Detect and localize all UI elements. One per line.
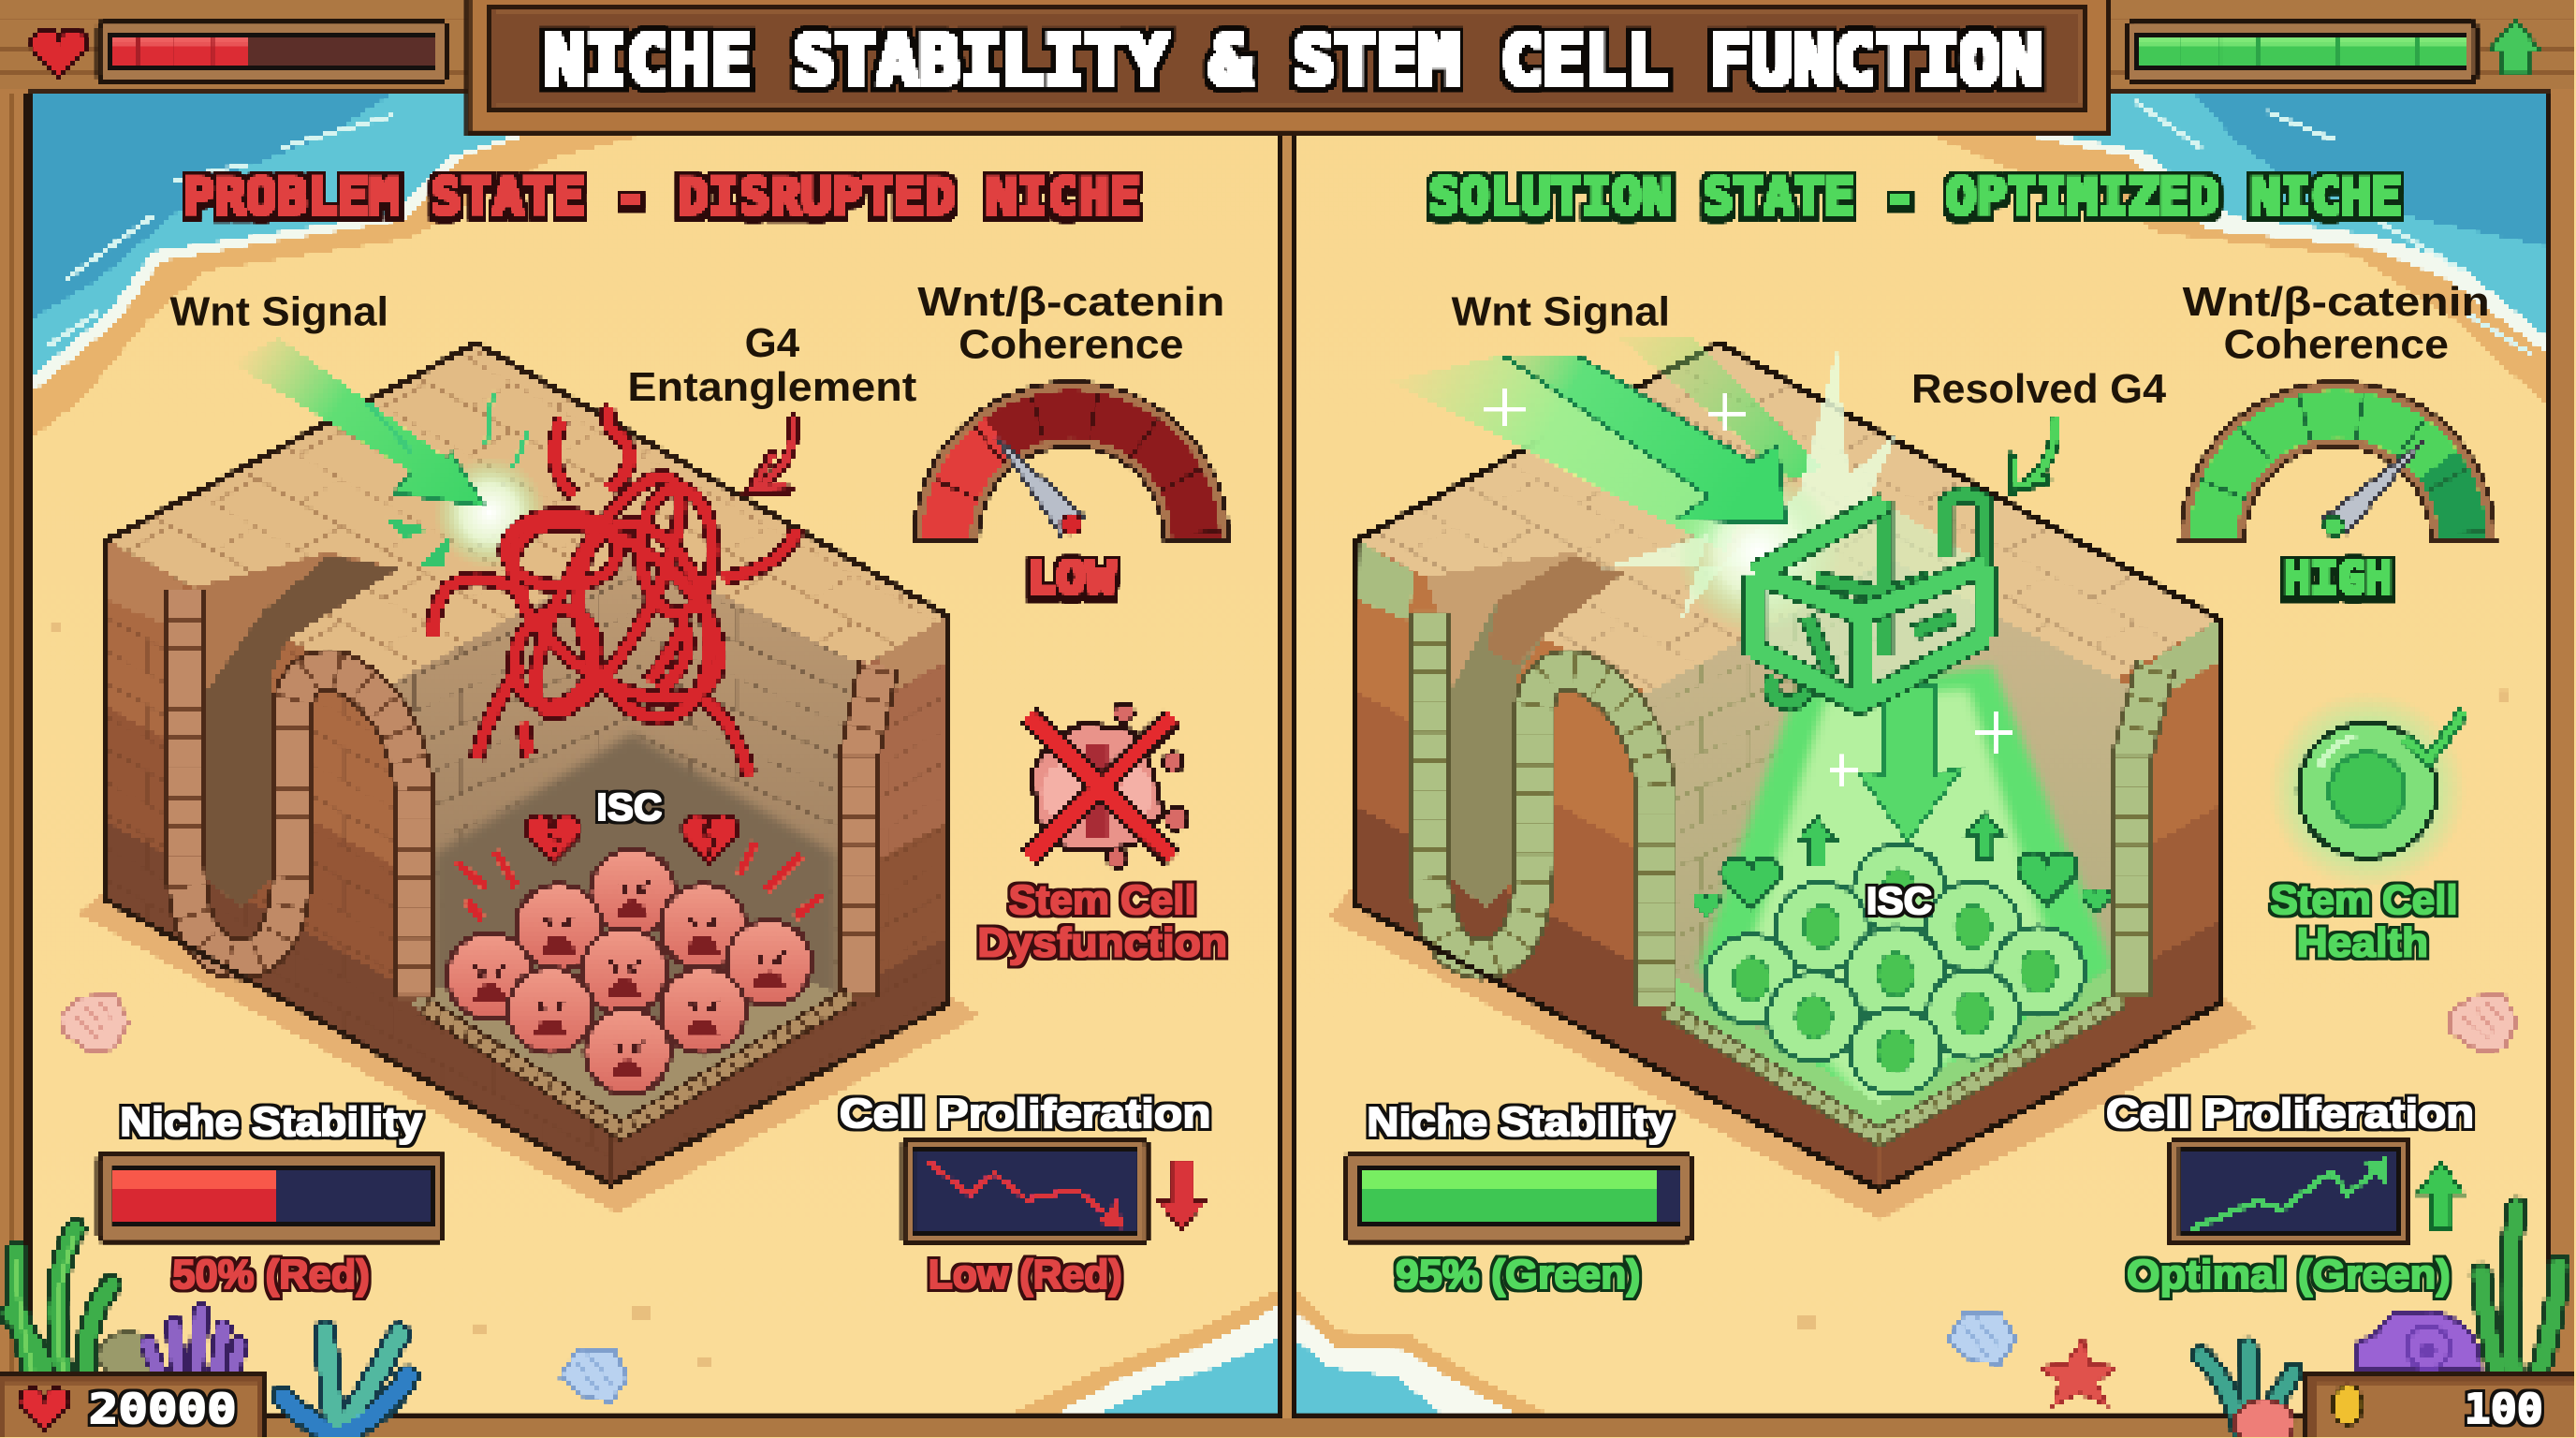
water: top-right shore <box>1928 82 2546 406</box>
crypt lumen <box>1426 552 1623 907</box>
label: G4 entanglement <box>627 320 917 410</box>
niche stability bar: 95% <box>1345 1155 1690 1240</box>
shell: blue <box>1949 1313 2016 1364</box>
shell: pink <box>61 994 128 1051</box>
Wnt signal arrow: bright <box>1392 337 1895 634</box>
arrow up <box>2417 1162 2465 1229</box>
up arrows and hearts <box>1693 812 2110 917</box>
title banner <box>468 0 2108 131</box>
heading: solution state: SOLUTION STATE - OPTIMIZED NICHE <box>1429 169 2402 226</box>
label: Wnt signal: Wnt Signal <box>1452 289 1670 335</box>
gauge value: high: HIGH <box>2284 553 2392 605</box>
white outlined labels <box>120 785 1211 1145</box>
Wnt signal arrow <box>230 339 546 568</box>
label: ISC: ISC <box>1866 879 1932 922</box>
label: coherence <box>2183 279 2490 368</box>
panel: problem state, disrupted niche <box>61 169 1231 1401</box>
panel: solution state, optimized niche <box>1327 169 2517 1405</box>
niche stability bar: 50% <box>98 1155 444 1240</box>
label: ISC: ISC <box>596 785 662 829</box>
top HUD and title banner <box>32 0 2541 131</box>
score panel: hearts <box>0 1373 266 1438</box>
red outlined labels <box>172 877 1227 1298</box>
icon: up arrow <box>2489 22 2541 74</box>
icon: heart <box>32 29 86 77</box>
arrow to resolved G4 <box>2011 420 2056 490</box>
label: stem cell health: Health <box>2297 919 2428 965</box>
water: top-left shore <box>30 82 681 440</box>
arrow down <box>1158 1162 1206 1229</box>
value: 50%: 50% (Red) <box>172 1252 370 1298</box>
score value: 20000: 20000 <box>89 1386 237 1433</box>
G4 tangle <box>433 407 797 775</box>
crypt interior wall <box>394 550 871 1134</box>
label: coherence: Coherence <box>959 322 1184 368</box>
value: optimal: Optimal (Green) <box>2127 1252 2451 1298</box>
heading: problem state: PROBLEM STATE - DISRUPTED NICHE <box>184 169 1140 226</box>
stem cell dysfunction icon <box>1029 703 1188 868</box>
label: Wnt signal: Wnt Signal <box>170 289 388 335</box>
value: low: Low (Red) <box>929 1252 1122 1298</box>
stem cell health icon <box>2269 692 2466 889</box>
seaweed: left <box>10 1229 111 1371</box>
cell proliferation chart: rising <box>2170 1140 2408 1244</box>
health bar: low <box>98 23 446 81</box>
shell: pink <box>2450 994 2517 1051</box>
crypt interior wall <box>1643 559 2145 1134</box>
label: G4 entanglement: Entanglement <box>627 364 917 410</box>
ISC cluster: stressed red cells <box>446 849 812 1094</box>
starfish <box>2039 1339 2117 1405</box>
label: stem cell dysfunction: Dysfunction <box>977 919 1227 965</box>
label: coherence: Wnt/β-catenin <box>917 279 1224 325</box>
label: coherence: Coherence <box>2224 322 2449 368</box>
crypt block: isometric tissue niche, healthy <box>1327 344 2254 1219</box>
teal coral: left <box>283 1331 407 1438</box>
label: coherence <box>917 279 1224 368</box>
coin value: 100: 100 <box>2465 1386 2543 1433</box>
label: stem cell dysfunction <box>977 877 1227 965</box>
sand specks <box>50 624 2510 1365</box>
label: niche stability: Niche Stability <box>1367 1099 1673 1145</box>
cell proliferation chart: falling <box>903 1140 1147 1244</box>
coherence gauge: low <box>912 414 1231 539</box>
water: bottom of right panel <box>1296 1290 1553 1416</box>
resolved G4 cage <box>1754 494 1986 703</box>
gauge value: low: LOW <box>1027 553 1116 605</box>
rock and purple coral: left <box>98 1312 240 1379</box>
broken hearts and stress marks <box>457 814 822 920</box>
label: resolved G4: Resolved G4 <box>1911 366 2167 412</box>
label: niche stability: Niche Stability <box>120 1099 423 1145</box>
score panel: coins <box>2306 1373 2576 1438</box>
beam of light <box>1697 666 2115 1131</box>
value: 95%: 95% (Green) <box>1396 1252 1640 1298</box>
top surface edge lips <box>107 540 184 633</box>
label: cell proliferation: Cell Proliferation <box>840 1091 1211 1137</box>
shell: blue <box>560 1349 627 1401</box>
ISC cluster: healthy green cells <box>1705 844 2085 1094</box>
crypt block: isometric tissue niche <box>79 344 979 1212</box>
label: stem cell health <box>2271 877 2458 965</box>
label: G4 entanglement: G4 <box>745 320 800 366</box>
label: coherence: Wnt/β-catenin <box>2183 279 2490 325</box>
crypt lumen <box>184 552 399 907</box>
coherence gauge: high <box>2178 414 2497 539</box>
light beam down arrow <box>1830 687 2012 842</box>
label: cell proliferation: Cell Proliferation <box>2106 1091 2474 1137</box>
green outlined labels <box>1396 877 2458 1298</box>
energy bar: high <box>2128 23 2476 81</box>
teal coral and pink creature: right <box>2202 1347 2293 1438</box>
title: NICHE STABILITY & STEM CELL FUNCTION <box>544 22 2042 100</box>
crypt brick band <box>185 588 879 1131</box>
label: stem cell dysfunction: Stem Cell <box>1009 877 1196 923</box>
water: bottom of left panel <box>1005 1290 1278 1416</box>
crypt moss brick band <box>1429 611 2156 1137</box>
white outlined labels <box>1367 879 2474 1145</box>
bottom decorations and counters <box>0 1208 2576 1438</box>
seaweed: right <box>2481 1208 2559 1371</box>
arrow to G4 tangle <box>749 419 794 492</box>
purple snail <box>2356 1312 2481 1371</box>
label: stem cell health: Stem Cell <box>2271 877 2458 923</box>
top surface edge lips <box>1357 540 1412 621</box>
